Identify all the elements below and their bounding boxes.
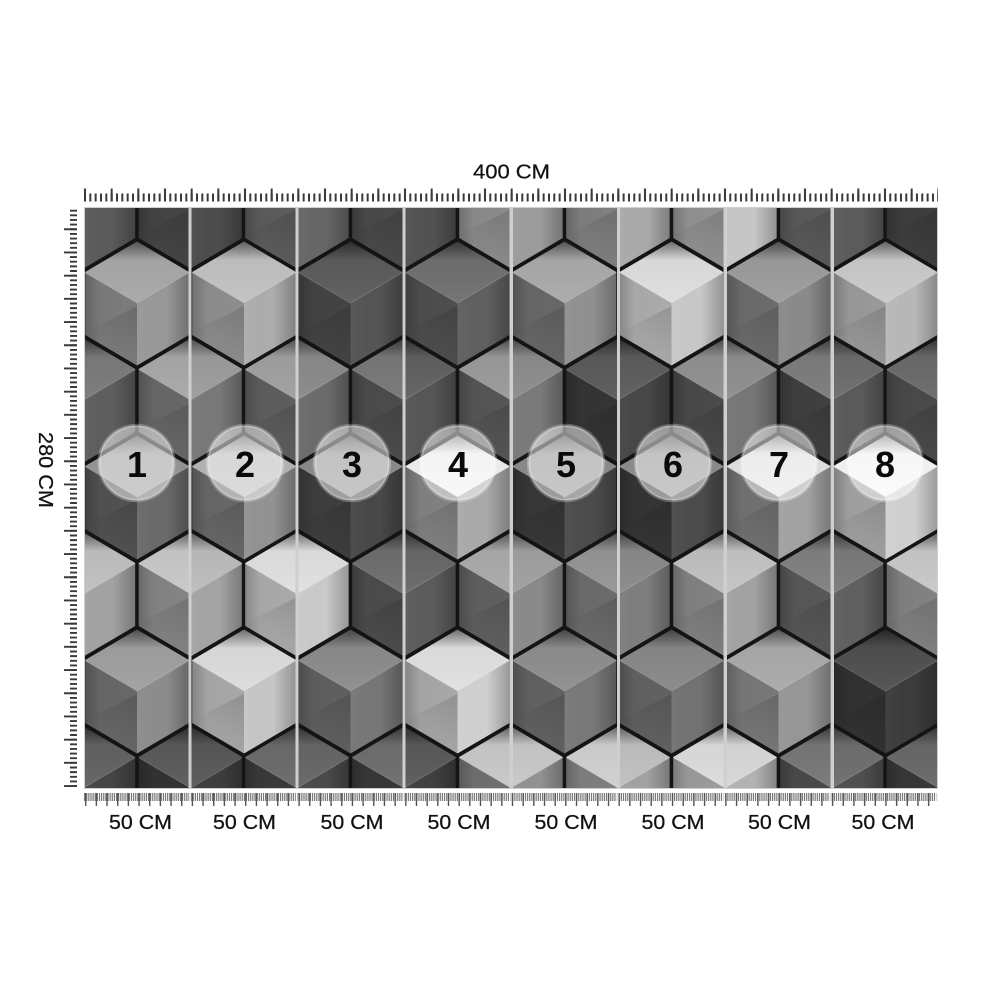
badge 1: [99, 426, 174, 500]
cube row 1: [297, 240, 404, 368]
upper half cubes: [778, 142, 992, 270]
panel 8: [778, 142, 992, 852]
cube row 1: [404, 240, 511, 368]
cube row 3: [832, 434, 939, 562]
row 6 half cubes: [513, 726, 617, 788]
cube row 5: [190, 628, 298, 756]
upper half cubes: [406, 208, 510, 268]
upper half cubes: [513, 208, 617, 268]
cube row 5: [404, 628, 511, 756]
badge 1: 1: [127, 444, 147, 485]
upper half cubes: [298, 208, 402, 268]
badge 3: 3: [342, 444, 362, 485]
panel width labels: 50 CM: [109, 811, 172, 834]
panel 1: [85, 208, 188, 788]
cube row 1: [832, 240, 939, 368]
upper half cubes: [192, 208, 296, 268]
row 4 half cubes: [298, 532, 402, 656]
cube row 5: [84, 628, 190, 756]
panel width labels: 50 CM: [534, 811, 598, 834]
cube row 3: [84, 434, 190, 562]
cube row 3: [725, 434, 832, 562]
row 2 half cubes: [672, 336, 886, 464]
row 4 half cubes: [406, 532, 510, 656]
cube row 1: [84, 240, 190, 368]
row 6 half cubes: [85, 726, 188, 788]
panel width labels: 50 CM: [642, 811, 704, 834]
panel width labels: 50 CM: [428, 811, 490, 834]
panel backing and gaps: [84, 207, 938, 789]
row 6 half cubes: [778, 724, 992, 852]
panel width labels: 50 CM: [748, 811, 811, 834]
badge 4: 4: [448, 444, 468, 485]
panel width labels: [109, 811, 914, 834]
cube row 5: [297, 628, 404, 756]
row 4 half cubes: [513, 532, 617, 656]
row 6 half cubes: [298, 726, 402, 788]
row 4 half cubes: [85, 532, 188, 656]
cube row 3: [297, 434, 404, 562]
badge 6: [636, 426, 710, 500]
panel width labels: 50 CM: [213, 811, 276, 834]
row 6 half cubes: [564, 724, 778, 852]
row 6 half cubes: [406, 726, 510, 788]
panel 3: [298, 208, 402, 788]
title: total width: 400 CM: [473, 160, 550, 184]
badge 3: [314, 426, 390, 500]
upper half cubes: [564, 142, 778, 270]
row 4 half cubes: [778, 530, 992, 658]
cube row 1: [511, 240, 618, 368]
cube row 3: [404, 434, 511, 562]
row 4 half cubes: [564, 530, 778, 658]
cube row 5: [725, 628, 832, 756]
row 6 half cubes: [672, 724, 886, 852]
cube row 5: [618, 628, 725, 756]
row 2 half cubes: [85, 338, 188, 462]
badge 2: [208, 426, 282, 500]
row 2 half cubes: [406, 338, 510, 462]
badge 5: 5: [556, 444, 576, 485]
cube row 5: [832, 628, 939, 756]
badge 7: 7: [769, 444, 789, 485]
panel 4: [406, 208, 510, 788]
cube row 3: [511, 434, 618, 562]
cube row 1: [618, 240, 725, 368]
badge 4: [420, 426, 496, 500]
badge 6: 6: [663, 444, 683, 485]
row 6 half cubes: [192, 726, 296, 788]
bottom ruler: [84, 797, 938, 800]
badge 5: [528, 426, 604, 500]
row 2 half cubes: [192, 338, 296, 462]
panel width labels: 50 CM: [852, 811, 914, 834]
row 2 half cubes: [513, 338, 617, 462]
cube row 1: [190, 240, 298, 368]
cube row 3: [618, 434, 725, 562]
panel width labels: 50 CM: [320, 811, 384, 834]
row 2 half cubes: [298, 338, 402, 462]
upper half cubes: [85, 208, 188, 268]
row 4 half cubes: [672, 530, 886, 658]
badge 8: [848, 426, 922, 500]
height label: 280 CM: [34, 432, 57, 508]
cube row 1: [725, 240, 832, 368]
badge 8: 8: [875, 444, 895, 485]
left ruler: [70, 208, 74, 787]
panel 2: [192, 208, 296, 788]
cube row 5: [511, 628, 618, 756]
badge 7: [742, 426, 816, 500]
panel 5: [513, 208, 617, 788]
top ruler: [84, 195, 938, 198]
panel 7: [672, 142, 886, 852]
row 2 half cubes: [778, 336, 992, 464]
row 2 half cubes: [564, 336, 778, 464]
badge 2: 2: [235, 444, 255, 485]
row 4 half cubes: [192, 532, 296, 656]
panel 6: [564, 142, 778, 852]
upper half cubes: [672, 142, 886, 270]
cube row 3: [190, 434, 298, 562]
